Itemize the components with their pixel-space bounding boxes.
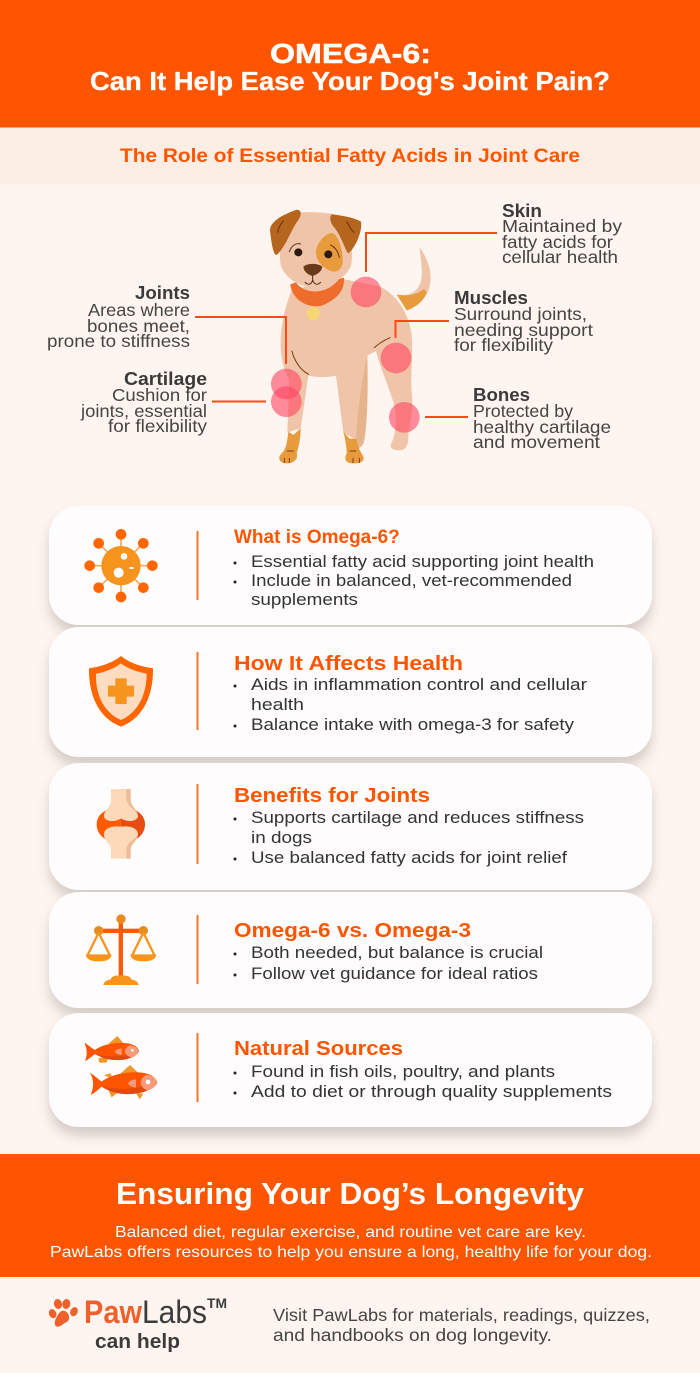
subtitle band: The Role of Essential Fatty Acids in Joint Care <box>120 145 580 167</box>
callout: muscles <box>454 288 593 355</box>
callout: cartilage: joints, essential <box>80 401 207 421</box>
longevity banner: PawLabs offers resources to help you ensure a long, healthy life for your dog. <box>50 1244 652 1261</box>
dog leg creases <box>284 338 390 463</box>
heading: Benefits for Joints <box>234 784 430 807</box>
callout: bones: Bones <box>473 385 530 405</box>
bullet list: in dogs <box>251 828 312 847</box>
callout markers: pink joint circles <box>271 277 420 433</box>
icon: shield with cross <box>89 656 153 727</box>
callout: muscles: for flexibility <box>454 335 553 355</box>
bullet list <box>234 808 584 867</box>
bullet list: Found in fish oils, poultry, and plants <box>251 1062 555 1081</box>
logo: PawLabs can help: can help <box>95 1331 180 1353</box>
callout: skin: fatty acids for <box>502 232 613 252</box>
bullet list <box>234 675 587 734</box>
callout: muscles: needing support <box>454 320 593 340</box>
callout: muscles: Muscles <box>454 288 528 308</box>
longevity banner: Balanced diet, regular exercise, and routine vet care are key. <box>115 1224 586 1241</box>
icon: balance scale <box>86 914 156 985</box>
callout: bones: healthy cartilage <box>473 417 611 437</box>
callout: skin <box>502 201 622 267</box>
logo: PawLabs can help <box>47 1294 227 1353</box>
dog body <box>281 278 412 450</box>
heading: What is Omega-6? <box>234 527 400 548</box>
bullet list: Add to diet or through quality supplements <box>251 1082 612 1101</box>
bullet list: Aids in inflammation control and cellular <box>251 675 587 694</box>
bullet list: supplements <box>251 590 358 609</box>
heading: How It Affects Health <box>234 652 463 675</box>
bullet list: Essential fatty acid supporting joint health <box>251 552 594 571</box>
subtitle band <box>0 128 700 184</box>
callout: joints <box>47 283 190 351</box>
panel: what is omega-6 <box>49 506 652 625</box>
callout: bones <box>473 385 611 452</box>
bullet list: Include in balanced, vet-recommended <box>251 571 572 590</box>
bullet list: Follow vet guidance for ideal ratios <box>251 964 538 983</box>
callout: joints: Areas where <box>88 300 190 320</box>
callout: bones: Protected by <box>473 401 573 421</box>
bullet list: Balance intake with omega-3 for safety <box>251 715 575 734</box>
panel: how it affects health <box>49 627 652 757</box>
longevity banner: Ensuring Your Dog’s Longevity <box>116 1176 585 1211</box>
bullet list: Both needed, but balance is crucial <box>251 943 543 962</box>
footer text: and handbooks on dog longevity. <box>273 1325 552 1345</box>
panel: benefits for joints <box>49 763 652 890</box>
callout: skin: Skin <box>502 201 542 221</box>
icon: omega-6 molecule <box>84 529 158 602</box>
longevity banner <box>0 1154 700 1277</box>
logo: PawLabs can help: Labs <box>142 1294 207 1330</box>
bullet list <box>234 1062 612 1101</box>
bullet list: health <box>251 695 304 714</box>
heading: Omega-6 vs. Omega-3 <box>234 919 471 942</box>
header banner <box>0 0 700 128</box>
header banner: OMEGA-6: <box>270 38 431 69</box>
callout: muscles: Surround joints, <box>454 304 587 324</box>
callout: cartilage: Cushion for <box>112 385 207 405</box>
icon: paw <box>47 1298 79 1327</box>
callout: cartilage <box>80 369 207 436</box>
bullet list <box>234 943 543 983</box>
header banner: Can It Help Ease Your Dog's Joint Pain? <box>90 66 610 96</box>
icon: knee joint <box>97 789 145 859</box>
panel: omega-6 vs omega-3 <box>49 892 652 1008</box>
bullet list: Use balanced fatty acids for joint relief <box>251 848 567 867</box>
callout: joints: prone to stiffness <box>47 331 190 351</box>
logo: PawLabs can help: Paw <box>84 1294 142 1330</box>
callout: joints: Joints <box>135 283 190 303</box>
dog collar and tag <box>290 278 344 320</box>
dog illustration <box>270 210 431 463</box>
dog head <box>270 210 361 288</box>
icon: dog tail <box>397 247 431 310</box>
footer text: Visit PawLabs for materials, readings, quizzes, <box>273 1305 650 1325</box>
panel: natural sources <box>49 1013 652 1127</box>
callout: skin: cellular health <box>502 247 618 267</box>
dog front paws <box>279 428 364 463</box>
bullet list: Supports cartilage and reduces stiffness <box>251 808 584 827</box>
bullet list <box>234 552 594 609</box>
callout: cartilage: Cartilage <box>124 369 207 389</box>
icon: fish <box>84 1036 157 1099</box>
callout connector lines <box>195 233 497 417</box>
footer text <box>273 1305 650 1345</box>
heading: Natural Sources <box>234 1037 403 1060</box>
back hind leg <box>355 355 368 448</box>
callout: bones: and movement <box>473 432 600 452</box>
logo: PawLabs can help: TM <box>207 1295 227 1311</box>
callout: joints: bones meet, <box>87 316 190 336</box>
callout: skin: Maintained by <box>502 216 622 236</box>
callout: cartilage: for flexibility <box>108 416 207 436</box>
